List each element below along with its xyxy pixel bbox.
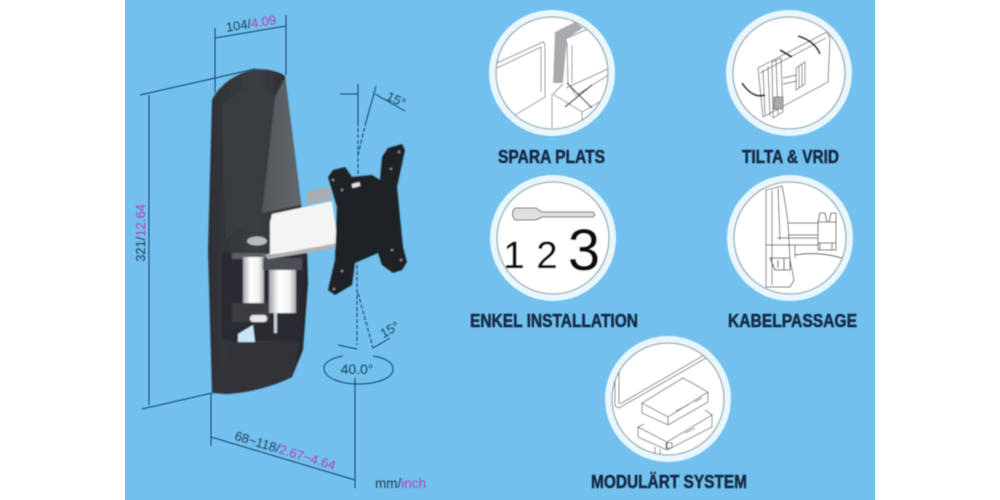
label: enkel installation: ENKEL INSTALLATION (470, 311, 638, 331)
label: kabelpassage: KABELPASSAGE (728, 311, 857, 331)
feature: enkel installation: 2 (536, 235, 558, 277)
feature: tilta och vrid (726, 10, 852, 136)
feature: enkel installation: 3 (568, 218, 600, 283)
plate holes (332, 151, 402, 290)
dimension: depth 68~118: 68~118/2.67~4.64 (233, 428, 337, 473)
feature: spara plats (489, 10, 615, 136)
product drawing: wall mount (208, 69, 407, 394)
icon circle (490, 175, 616, 301)
icon circle (727, 175, 853, 301)
pivot knob (247, 236, 267, 246)
cylinder band (263, 258, 302, 270)
label: tilta och vrid: TILTA & VRID (742, 147, 839, 167)
unit legend: mm/inch (375, 476, 426, 491)
icon circle (726, 10, 852, 136)
angle: 15 degrees top: 15° (384, 89, 408, 111)
icon: screwdriver (512, 208, 595, 220)
icon: cross (565, 83, 592, 108)
dimension lines (140, 15, 405, 488)
upper cross bar (232, 253, 270, 259)
angle: 40 degrees: 40.0° (341, 361, 373, 377)
icon: screen and media boxes (615, 354, 712, 456)
icon: motion arrows (742, 36, 820, 96)
lower pivot block (232, 303, 270, 322)
plate slot (352, 182, 360, 188)
feature: modulärt system (605, 336, 731, 462)
white arm (262, 201, 338, 256)
numbers 1 2 3: 1 (503, 235, 525, 277)
wall mount body (208, 69, 308, 394)
body front panel (222, 90, 275, 240)
pin (274, 313, 277, 333)
icon circle (489, 10, 615, 136)
left cylinder (243, 257, 264, 303)
icon circle (605, 336, 731, 462)
dimension: width 104/4.09: 104/4.09 (225, 12, 277, 35)
dimension: height 321/12.64: 321/12.64 (133, 204, 148, 262)
rotation ellipse (324, 356, 393, 384)
angle: 15 degrees bottom: 15° (377, 318, 402, 341)
icon: wall and screens (497, 22, 610, 128)
label: modulärt system: MODULÄRT SYSTEM (591, 472, 747, 492)
body side panel (262, 78, 301, 213)
upper knob at plate (307, 187, 332, 204)
recess in body (222, 253, 305, 342)
blue background panel (125, 0, 875, 500)
right cylinder (269, 270, 296, 313)
icon: screen with arm (758, 32, 830, 118)
feature: kabelpassage (727, 175, 853, 301)
label: spara plats: SPARA PLATS (498, 147, 605, 167)
feature: enkel installation (490, 175, 616, 301)
cable hole (238, 325, 255, 342)
VESA plate (328, 144, 407, 295)
lower bolt (250, 315, 267, 322)
icon: mount side view (766, 186, 842, 287)
